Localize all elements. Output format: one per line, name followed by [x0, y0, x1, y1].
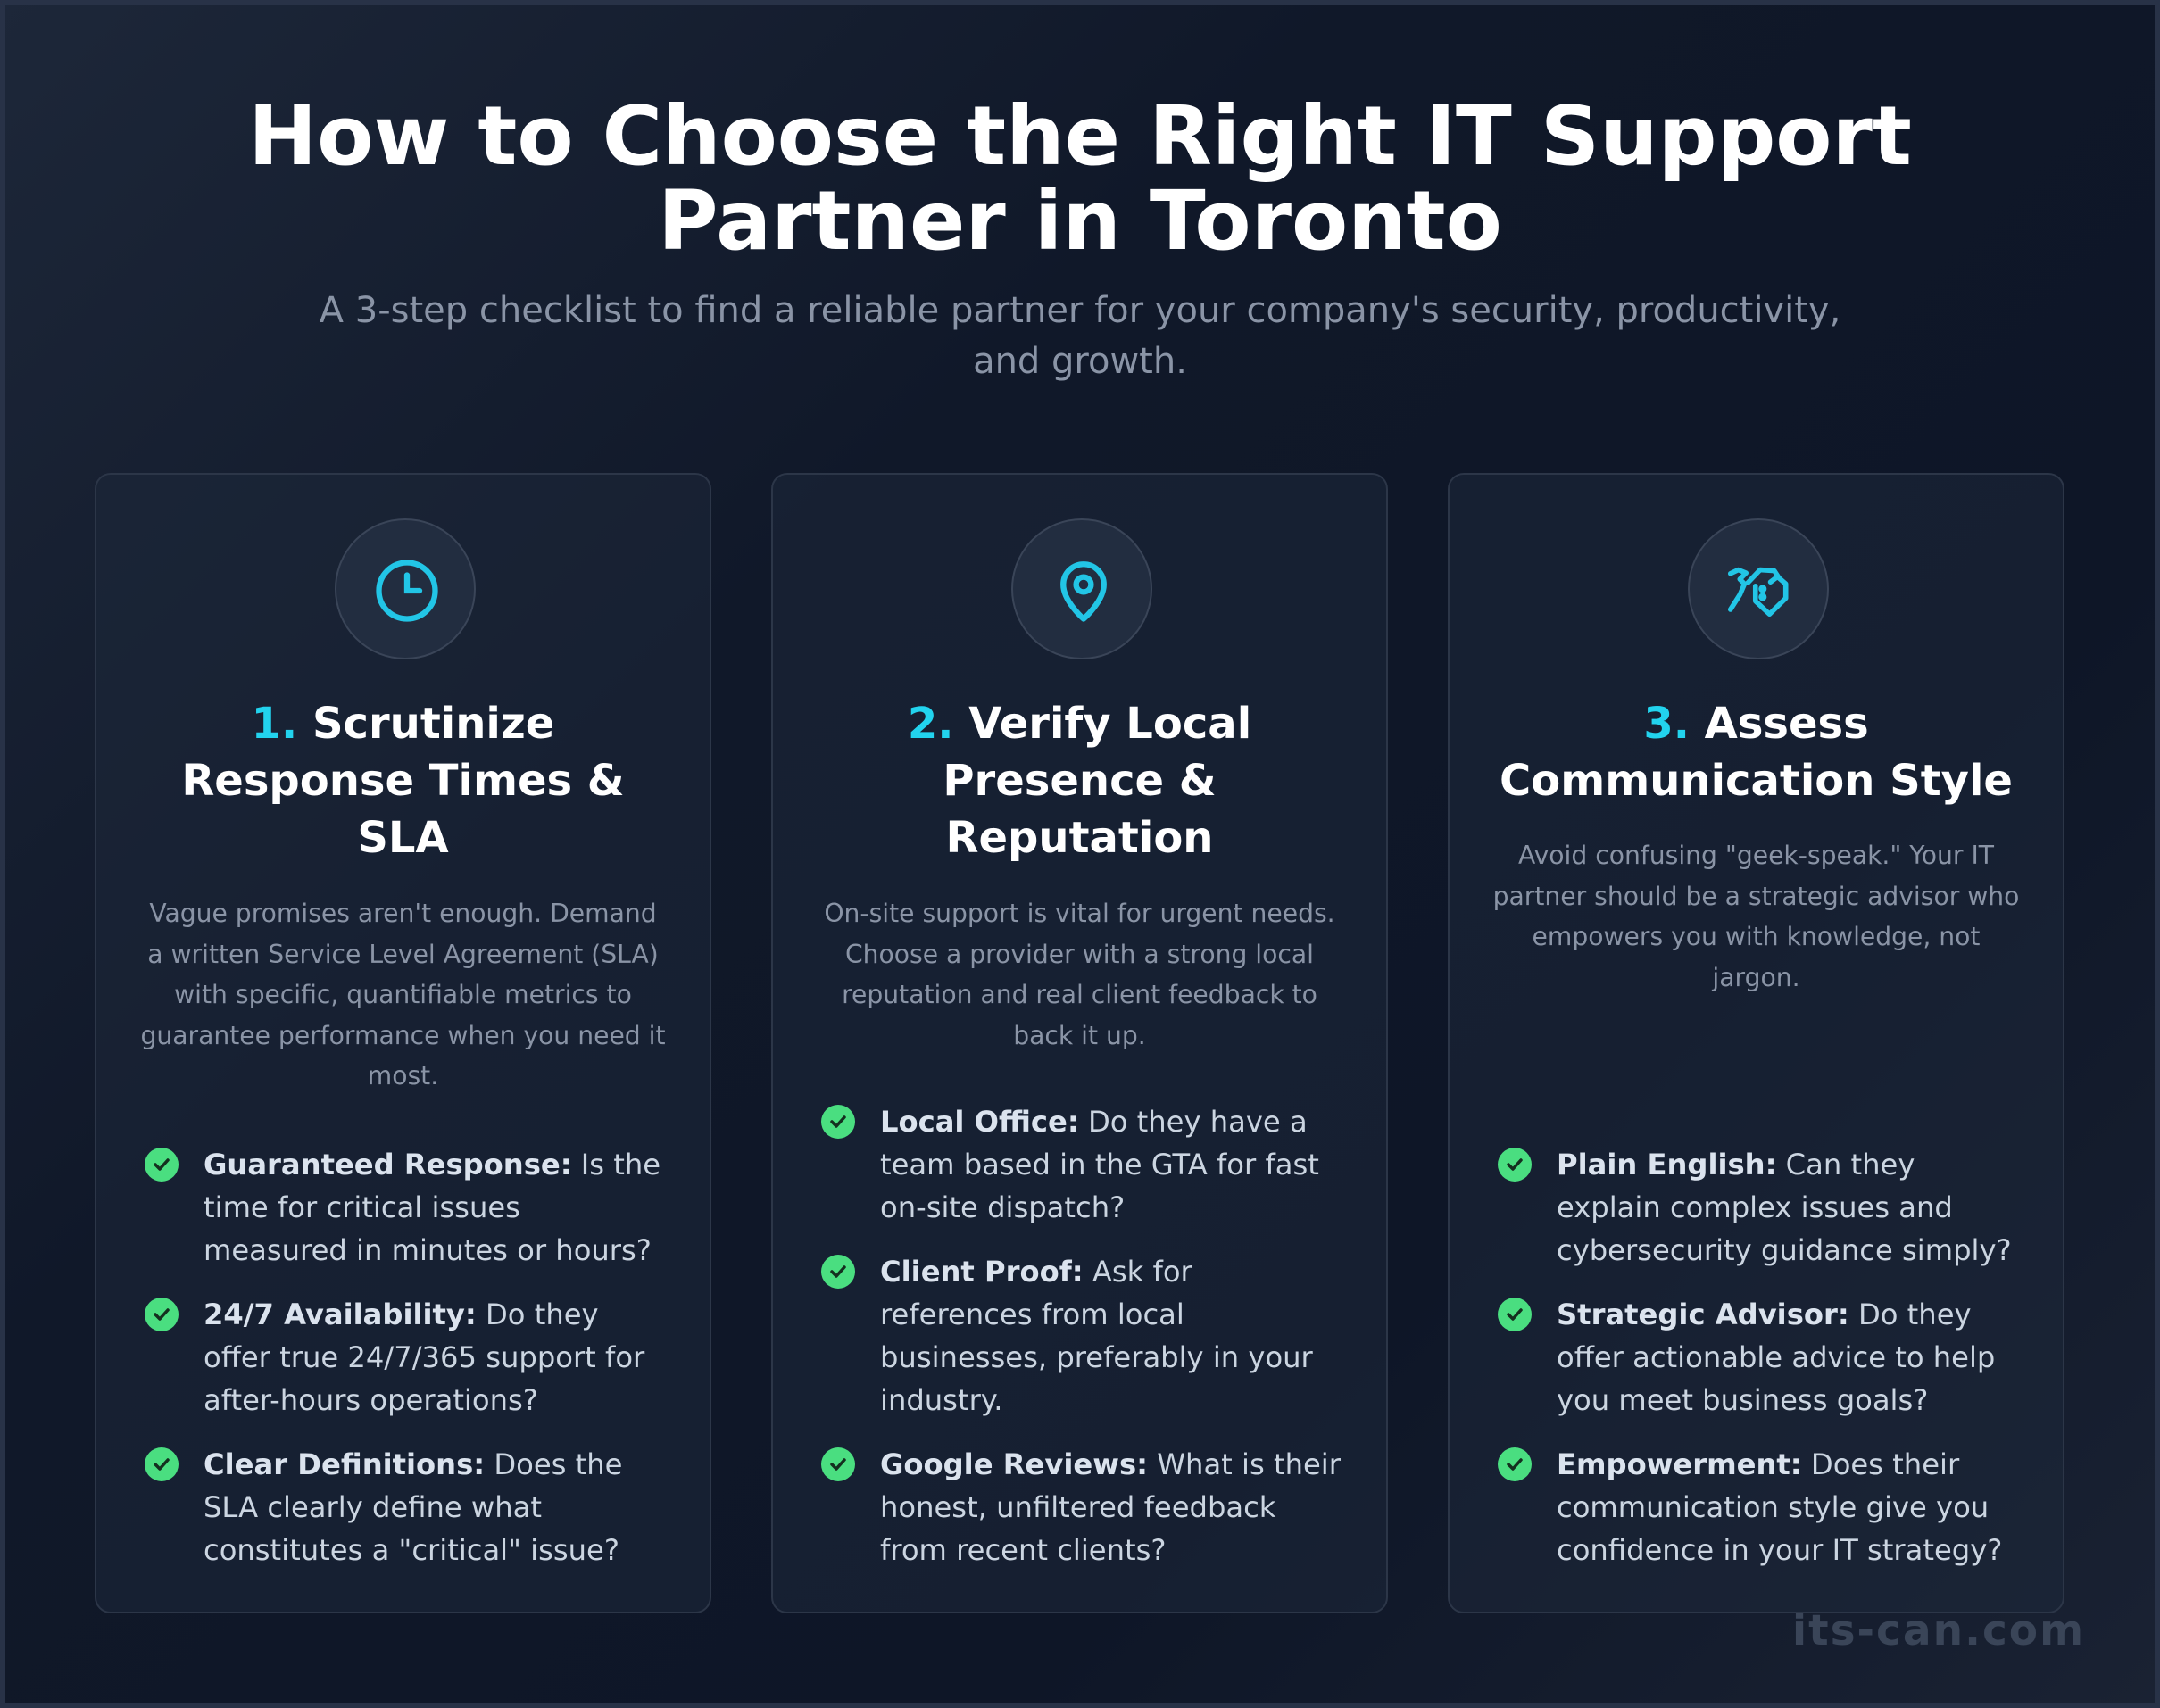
text: step 2 description: back it up. — [1013, 1021, 1146, 1050]
checklist: step 1: Guaranteed Response: Is the — [204, 1148, 660, 1182]
text: step 1 description: most. — [368, 1061, 438, 1090]
checklist: step 3: Plain English: Can they — [1557, 1148, 1915, 1182]
text: step 1 description: a written Service Level Agreement (SLA) — [147, 940, 659, 969]
heading: step 3: Communication Style — [1500, 756, 2013, 806]
checklist: step 2: industry. — [880, 1383, 1003, 1417]
checklist: step 1: measured in minutes or hours? — [204, 1233, 652, 1267]
heading: step 1: 1. Scrutinize — [252, 699, 554, 749]
title — [248, 88, 1912, 269]
text: step 2 description: reputation and real client feedback to — [842, 980, 1317, 1009]
text: step 3 description: empowers you with knowledge, not — [1533, 922, 1980, 951]
heading: step 2: Presence & — [943, 756, 1217, 806]
checklist: step 3: Strategic Advisor: Do they — [1557, 1298, 1972, 1331]
text: step 1 description: with specific, quantifiable metrics to — [174, 980, 632, 1009]
panel: step 2 — [771, 473, 1388, 1613]
heading: step 1: Response Times & — [181, 756, 625, 806]
title: How to Choose the Right IT Support — [248, 88, 1912, 184]
heading: step 2: Reputation — [946, 813, 1213, 863]
title: Partner in Toronto — [658, 173, 1502, 269]
checklist: step 2: team based in the GTA for fast — [880, 1148, 1319, 1182]
heading: step 3: 3. Assess — [1643, 699, 1869, 749]
checklist: step 1: after-hours operations? — [204, 1383, 538, 1417]
checklist: step 3 — [1498, 1148, 2012, 1567]
checklist: step 2: businesses, preferably in your — [880, 1340, 1313, 1374]
checklist: step 1: Clear Definitions: Does the — [204, 1447, 622, 1481]
checklist: step 2: references from local — [880, 1298, 1184, 1331]
text: step 3 description — [1493, 841, 2019, 992]
heading: step 1: SLA — [357, 813, 449, 863]
checklist: step 1: SLA clearly define what — [204, 1490, 542, 1524]
icon: handshake — [1688, 518, 1829, 659]
text: step 2 description: On-site support is vital for urgent needs. — [824, 899, 1335, 928]
heading: step 3 — [1500, 699, 2013, 806]
checklist: step 2: on-site dispatch? — [880, 1190, 1125, 1224]
checklist: step 3: offer actionable advice to help — [1557, 1340, 1995, 1374]
text: step 3 description: partner should be a strategic advisor who — [1493, 882, 2019, 911]
text: step 2 description: Choose a provider with a strong local — [845, 940, 1314, 969]
checklist: step 1: 24/7 Availability: Do they — [204, 1298, 599, 1331]
subtitle — [320, 290, 1840, 382]
heading: step 1 — [181, 699, 625, 863]
checklist: step 1: time for critical issues — [204, 1190, 520, 1224]
subtitle: and growth. — [973, 341, 1187, 382]
icon: map pin — [1011, 518, 1152, 659]
checklist: step 3: you meet business goals? — [1557, 1383, 1928, 1417]
icon: clock — [335, 518, 476, 659]
checklist: step 3: communication style give you — [1557, 1490, 1989, 1524]
text: step 3 description: jargon. — [1712, 963, 1800, 992]
checklist: step 3: confidence in your IT strategy? — [1557, 1533, 2002, 1567]
panel: step 1 — [95, 473, 711, 1613]
checklist: step 1: offer true 24/7/365 support for — [204, 1340, 644, 1374]
checklist: step 3: Empowerment: Does their — [1557, 1447, 1959, 1481]
checklist: step 3: cybersecurity guidance simply? — [1557, 1233, 2012, 1267]
checklist: step 2: Google Reviews: What is their — [880, 1447, 1341, 1481]
checklist: step 1 — [145, 1148, 660, 1567]
text: step 1 description — [140, 899, 666, 1090]
text: step 1 description: Vague promises aren't enough. Demand — [149, 899, 657, 928]
subtitle: A 3-step checklist to find a reliable partner for your company's security, productivity, — [320, 290, 1840, 331]
text: step 2 description — [824, 899, 1335, 1050]
checklist: step 1: constitutes a "critical" issue? — [204, 1533, 619, 1567]
checklist: step 2 — [821, 1105, 1341, 1567]
text: step 1 description: guarantee performance when you need it — [140, 1021, 666, 1050]
checklist: step 3: explain complex issues and — [1557, 1190, 1953, 1224]
panel: step 3 — [1448, 473, 2064, 1613]
checklist: step 2: from recent clients? — [880, 1533, 1166, 1567]
text: step 3 description: Avoid confusing "geek-speak." Your IT — [1518, 841, 1994, 870]
heading: step 2 — [908, 699, 1251, 863]
checklist: step 2: Client Proof: Ask for — [880, 1255, 1192, 1289]
checklist: step 2: Local Office: Do they have a — [880, 1105, 1308, 1139]
watermark: its-can.com — [1792, 1606, 2085, 1655]
checklist: step 2: honest, unfiltered feedback — [880, 1490, 1275, 1524]
heading: step 2: 2. Verify Local — [908, 699, 1251, 749]
